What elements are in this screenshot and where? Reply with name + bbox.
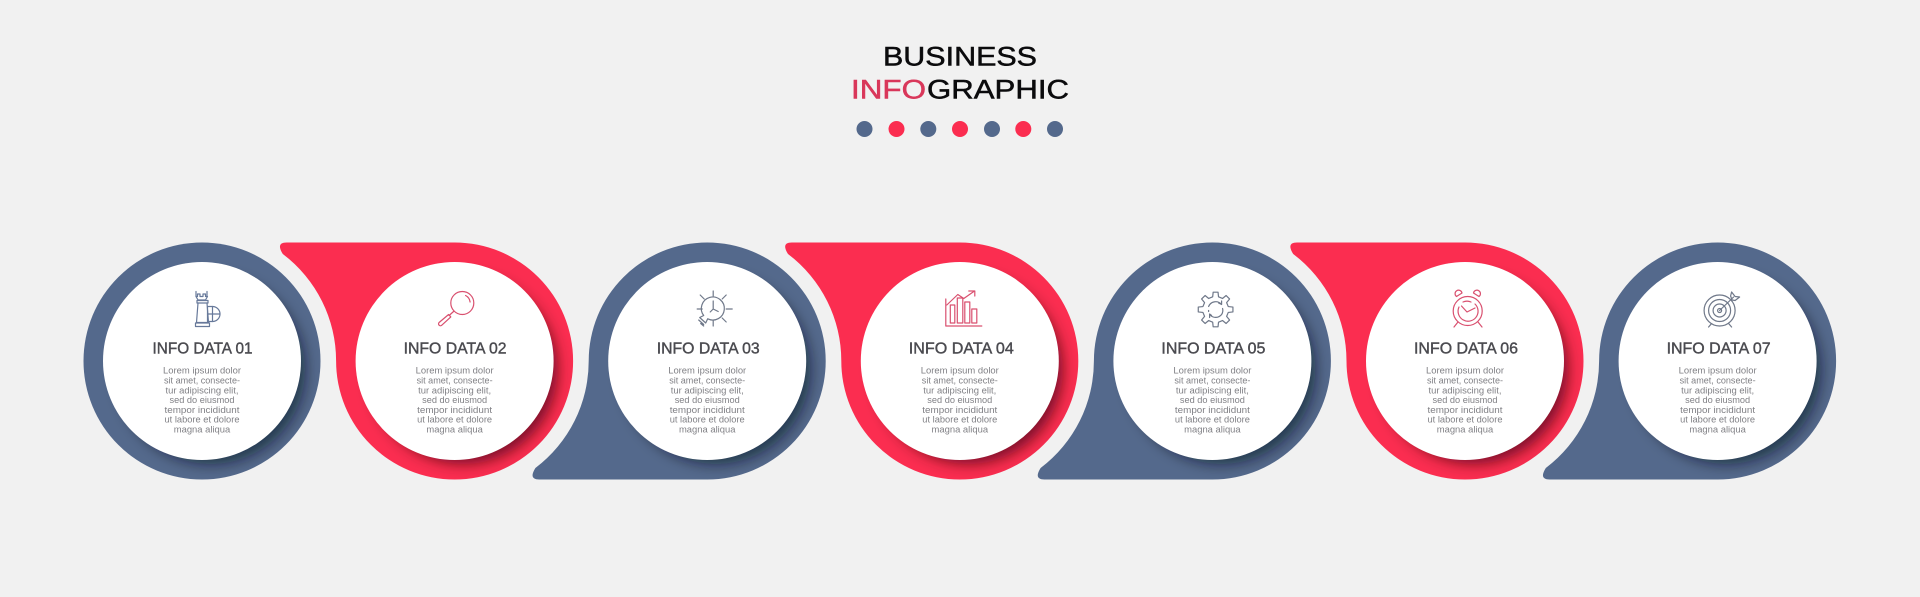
body text: tempor incididunt	[922, 405, 998, 416]
title: BUSINESS	[883, 42, 1037, 72]
body text: tempor incididunt	[1680, 405, 1755, 416]
body text: tur adipiscing elit,	[923, 385, 996, 396]
body text: ut labore et dolore	[670, 415, 745, 426]
body text: ut labore et dolore	[1680, 415, 1755, 426]
dot row	[856, 121, 1063, 137]
icon: chess tower and shield	[196, 292, 220, 326]
body text	[1426, 366, 1505, 436]
body text: tur adipiscing elit,	[1176, 385, 1249, 396]
body text: Lorem ipsum dolor	[921, 366, 1000, 376]
title: INFO	[851, 74, 926, 104]
body text: magna aliqua	[679, 424, 736, 436]
body text: magna aliqua	[1437, 424, 1494, 436]
body text: sed do eiusmod	[675, 395, 740, 406]
body text	[163, 366, 242, 436]
body text: tur adipiscing elit,	[418, 385, 491, 396]
icon: bar chart with arrow	[946, 291, 982, 326]
body text: sit amet, consecte-	[922, 376, 998, 386]
body text: Lorem ipsum dolor	[1173, 366, 1252, 376]
body text: magna aliqua	[1184, 424, 1241, 436]
body text: magna aliqua	[932, 424, 989, 436]
white circle	[1366, 262, 1564, 460]
body text: ut labore et dolore	[1175, 415, 1250, 426]
body text: ut labore et dolore	[1428, 415, 1502, 426]
body text: sed do eiusmod	[927, 395, 992, 406]
blue ring	[84, 242, 320, 480]
red teardrop	[1290, 242, 1584, 480]
body text: sed do eiusmod	[1685, 395, 1750, 406]
panel: info data 03	[533, 242, 826, 480]
panel: info data 06	[1290, 242, 1584, 480]
heading: INFO DATA 01	[152, 340, 252, 358]
icon: target with arrow	[1704, 292, 1740, 327]
body text: tempor incididunt	[1175, 405, 1250, 416]
icon: magnifier	[439, 292, 474, 326]
panel: info data 01	[84, 242, 320, 480]
blue teardrop	[1543, 242, 1836, 480]
body text: magna aliqua	[426, 424, 483, 436]
white circle	[356, 262, 554, 460]
body text: tempor incididunt	[417, 405, 492, 416]
heading: INFO DATA 02	[404, 340, 507, 358]
body text: ut labore et dolore	[417, 415, 492, 426]
title: GRAPHIC	[927, 74, 1069, 104]
blue teardrop	[1038, 242, 1331, 480]
heading: INFO DATA 06	[1414, 340, 1518, 358]
body text: sit amet, consecte-	[417, 376, 493, 386]
body text: Lorem ipsum dolor	[1426, 366, 1505, 376]
heading: INFO DATA 05	[1161, 340, 1265, 358]
red teardrop	[280, 242, 573, 480]
panel: info data 05	[1038, 242, 1331, 480]
body text: sit amet, consecte-	[164, 376, 240, 386]
blue teardrop	[533, 242, 826, 480]
body text: magna aliqua	[1689, 424, 1746, 436]
body text: tempor incididunt	[670, 405, 745, 416]
body text: ut labore et dolore	[922, 415, 997, 426]
body text: sed do eiusmod	[170, 395, 234, 406]
body text: sit amet, consecte-	[1680, 376, 1756, 386]
title	[851, 42, 1069, 104]
body text: magna aliqua	[174, 424, 231, 436]
body text	[1173, 366, 1252, 436]
body text	[668, 366, 747, 436]
white circle	[861, 262, 1059, 460]
panel: info data 02	[280, 242, 573, 480]
body text: tempor incididunt	[164, 405, 240, 416]
body text: Lorem ipsum dolor	[416, 366, 494, 376]
heading: INFO DATA 04	[909, 340, 1014, 358]
panel: info data 07	[1543, 242, 1836, 480]
body text: sed do eiusmod	[1432, 395, 1498, 406]
panel: info data 04	[785, 242, 1078, 480]
body text: Lorem ipsum dolor	[163, 366, 242, 376]
body text: Lorem ipsum dolor	[1679, 366, 1757, 376]
white circle	[1619, 262, 1817, 460]
body text: sit amet, consecte-	[1174, 376, 1250, 386]
icon: gear	[1198, 292, 1233, 327]
body text: tur adipiscing elit,	[671, 385, 744, 396]
white circle	[1113, 262, 1311, 460]
body text: sit amet, consecte-	[669, 376, 745, 386]
white circle	[608, 262, 806, 460]
body text	[1679, 366, 1757, 436]
body text: tempor incididunt	[1428, 405, 1503, 416]
icon: alarm clock	[1453, 290, 1482, 327]
body text: tur adipiscing elit,	[1681, 385, 1754, 396]
body text: tur adipiscing elit,	[166, 385, 238, 396]
body text: sit amet, consecte-	[1427, 376, 1503, 386]
icon: light bulb	[697, 291, 732, 326]
body text: sed do eiusmod	[1180, 395, 1245, 406]
body text	[921, 366, 1000, 436]
heading: INFO DATA 03	[657, 340, 760, 358]
body text: sed do eiusmod	[422, 395, 487, 406]
body text: tur adipiscing elit,	[1428, 385, 1502, 396]
body text: ut labore et dolore	[164, 415, 240, 426]
red teardrop	[785, 242, 1078, 480]
white circle	[103, 262, 301, 460]
heading: INFO DATA 07	[1667, 340, 1771, 358]
body text	[416, 366, 494, 436]
body text: Lorem ipsum dolor	[668, 366, 747, 376]
